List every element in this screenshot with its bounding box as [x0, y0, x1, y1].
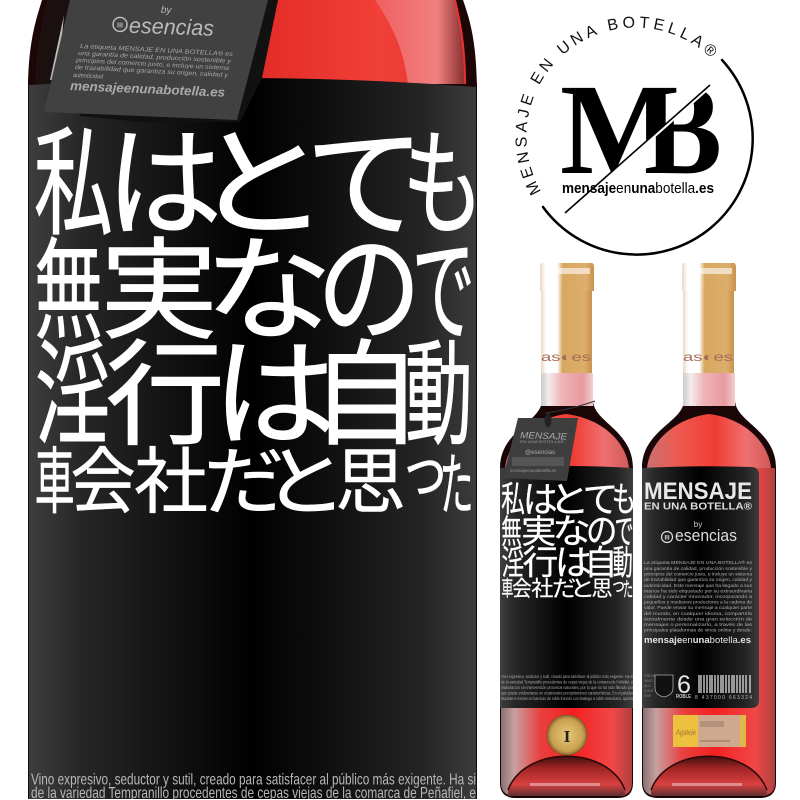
hanging tag: [44, 0, 278, 122]
back black label: [642, 466, 759, 708]
main Japanese message: 淫: [35, 332, 110, 460]
back bottle glass: [642, 373, 776, 798]
small wine description: Durante 6 meses en barricas de roble francés con trasiego a roble americano, aporta: [501, 696, 633, 701]
back label brand title: EN UNA BOTELLA®: [644, 502, 753, 512]
hanging tag: La etiqueta MENSAJE EN UNA BOTELLA® es: [80, 42, 234, 58]
panel: front bottle: [500, 263, 636, 798]
monogram diagonal: [565, 85, 710, 213]
small hanging tag: [503, 413, 578, 481]
monogram B: B: [644, 58, 722, 202]
small Japanese message: 動: [613, 544, 633, 582]
hanging tag: by: [161, 5, 173, 16]
back bottle punt: [651, 756, 767, 796]
hanging tag: principios del comercio justo, e incluye un sistema: [75, 57, 230, 72]
esencias logo: esencias: [675, 526, 737, 545]
back bottle capsule: as◐es: [683, 350, 733, 364]
large bottle red wine: [36, 0, 466, 84]
logo: Mensaje en una botella: [515, 16, 754, 256]
back label brand title: by: [694, 520, 702, 529]
barcode: 8 437000 663324: [695, 695, 752, 701]
small wine description: elaboración sin intervención procesos naturales, por lo que no ha sido filtrado por: [501, 685, 633, 690]
front bottle shoulder wine: [505, 414, 629, 468]
small legal column: CONT.: [644, 689, 655, 693]
main Japanese message: 会: [70, 442, 136, 523]
small Japanese message: 行: [523, 544, 558, 582]
main Japanese message: 動: [405, 331, 473, 459]
small legal column: ALC.: [644, 684, 652, 688]
back label paragraph: socialmente desde una gran selección de: [644, 616, 753, 621]
back label paragraph: [644, 559, 753, 633]
back label brand title: MENSAJE: [644, 478, 752, 505]
back label paragraph: principales plataformas de vinos online y desde:: [644, 628, 752, 633]
back label paragraph: pequeños y medianos productores a la cadena de: [644, 600, 752, 605]
glass left reflection: [36, 0, 75, 84]
main Japanese message: 行: [105, 331, 225, 459]
front gold medal: I: [564, 727, 571, 746]
back bottle neck: [683, 373, 735, 406]
small Japanese message: 思: [592, 577, 613, 601]
small Japanese message: [501, 479, 636, 602]
front bottle neck: [541, 373, 593, 406]
small Japanese message: は: [555, 543, 592, 583]
back bottle body: [643, 468, 775, 796]
small legal column: VINO: [644, 679, 653, 683]
back label URL: mensajeenunabotella.es: [644, 635, 751, 645]
wine highlight: [375, 0, 464, 84]
main Japanese message: な: [204, 227, 333, 354]
back label paragraph: manos ha sido etiquetado por su extraordinaria: [644, 588, 752, 593]
small Japanese message: も: [612, 481, 636, 520]
main Japanese message: だ: [204, 440, 284, 524]
main Japanese message: 車: [35, 443, 75, 523]
logo circle arc: [543, 60, 753, 255]
front bottle glass: [500, 373, 633, 798]
logo URL: mensajeenunabotella.es: [562, 180, 714, 197]
small Japanese message: の: [586, 511, 617, 552]
main Japanese message: 社: [134, 443, 208, 523]
main Japanese message: と: [193, 118, 330, 252]
back label paragraph: calidad y carácter innovador, incorporando a: [644, 594, 753, 599]
front gold medal: [547, 715, 587, 755]
barcode: [695, 675, 752, 701]
main Japanese message: と: [263, 440, 347, 525]
front bottle base: [501, 708, 632, 796]
back label paragraph: de trazabilidad que garantiza su origen, calidad y: [644, 577, 753, 582]
back label paragraph: del mundo, en cualquier idioma, compartirlo: [644, 611, 753, 616]
vintner sticker: Agaleje: [675, 728, 696, 737]
main Japanese message: は: [212, 329, 337, 461]
small Japanese message: 無: [501, 513, 522, 550]
small wine description: Vino expresivo, seductor y sutil, creado para satisfacer al público más exigente. Ha si: [501, 674, 633, 679]
small Japanese message: だ: [552, 576, 576, 601]
small wine description: [501, 674, 633, 701]
hanging tag: esencias: [129, 13, 214, 41]
small Japanese message: 淫: [502, 544, 524, 583]
front black label: [500, 466, 633, 708]
back label paragraph: principios del comercio justo, e incluye un sistema: [644, 572, 752, 577]
hanging tag: III: [117, 22, 123, 30]
main Japanese message: 自: [311, 331, 421, 459]
shield icon: [655, 675, 673, 697]
hanging tag: de trazabilidad que garantiza su origen, calidad y: [75, 64, 229, 79]
main Japanese message: た: [440, 448, 474, 524]
monogram M: M: [560, 58, 680, 202]
vintner sticker: [673, 715, 746, 747]
roble caption: ROBLE: [676, 694, 692, 700]
back label paragraph: La etiqueta MENSAJE EN UNA BOTELLA® es: [644, 559, 753, 565]
wine description text: [31, 772, 476, 800]
small legal column: [644, 674, 658, 698]
wine description text: Vino expresivo, seductor y sutil, creado para satisfacer al público más exigente. Ha si: [31, 772, 476, 788]
hanging tag: mensajeenunabotella.es: [70, 78, 225, 100]
main Japanese message: で: [412, 227, 475, 356]
small Japanese message: 自: [584, 544, 617, 583]
main Japanese message: 私: [34, 119, 113, 251]
small Japanese message: で: [615, 512, 633, 551]
back bottle shoulder wine: [647, 414, 771, 468]
number 6: 6: [677, 671, 691, 699]
small Japanese message: 社: [531, 576, 553, 601]
small Japanese message: た: [623, 579, 633, 602]
small Japanese message: て: [583, 479, 618, 520]
small hanging tag: mensajeenunabotella.es: [510, 468, 557, 473]
back label paragraph: autenticidad. Este mensaje que ha llegado a sus: [644, 583, 753, 588]
main Japanese message: 思: [335, 442, 406, 523]
small hanging tag: @esencias: [525, 450, 555, 456]
small Japanese message: 実: [521, 514, 556, 551]
panel: large bottle close-up: [28, 0, 484, 800]
main Japanese message: っ: [399, 437, 450, 506]
small Japanese message: と: [549, 480, 590, 520]
small Japanese message: な: [552, 512, 591, 550]
hanging tag: autenticidad: [73, 72, 104, 81]
small Japanese message: 会: [512, 577, 532, 601]
large bottle glass: [28, 0, 477, 799]
small wine description: de la variedad Tempranillo procedentes de cepas viejas de la comarca de Peñafiel, e: [501, 680, 633, 684]
main Japanese message: は: [106, 119, 222, 252]
small Japanese message: と: [570, 577, 595, 602]
main Japanese message: て: [305, 116, 425, 253]
small Japanese message: 私: [501, 481, 525, 520]
main Japanese message: の: [317, 222, 422, 357]
back label paragraph: una garantía de calidad, producción sostenible y: [644, 566, 753, 571]
small Japanese message: っ: [611, 575, 626, 596]
hanging tag: una garantía de calidad, producción sostenible y: [78, 50, 232, 65]
front bottle capsule: as◐es: [541, 350, 591, 364]
main Japanese message: 実: [100, 231, 218, 353]
small hanging tag: EN UNA BOTELLA®: [520, 439, 564, 444]
small Japanese message: は: [523, 479, 558, 520]
esencias logo: III: [664, 536, 670, 542]
back label paragraph: valor. Puede enviar su mensaje a cualquier parte: [644, 605, 752, 610]
small wine description: que puede evidenciarse en ocasionales precipitaciones características. En el paladar: [501, 690, 633, 696]
back label paragraph: mensajes o personalizarlo, a través de las: [644, 622, 753, 627]
front bottle punt: [508, 756, 625, 796]
small legal column: ORIGEN: [644, 674, 658, 678]
panel: back bottle: [642, 263, 776, 798]
back label brand title: [644, 478, 753, 529]
small legal column: ESP.: [644, 694, 652, 698]
main Japanese message: 無: [34, 231, 103, 353]
circular brand text: MENSAJE EN UNA BOTELLA®: [515, 16, 716, 196]
front bottle capsule: [540, 263, 594, 373]
small hanging tag: MENSAJE: [520, 430, 568, 442]
large black label: [29, 78, 476, 799]
back bottle capsule: [682, 263, 736, 373]
front bottle string: [545, 401, 595, 413]
small Japanese message: 車: [501, 576, 513, 601]
main Japanese message: も: [402, 121, 484, 250]
main Japanese message: [34, 116, 484, 525]
